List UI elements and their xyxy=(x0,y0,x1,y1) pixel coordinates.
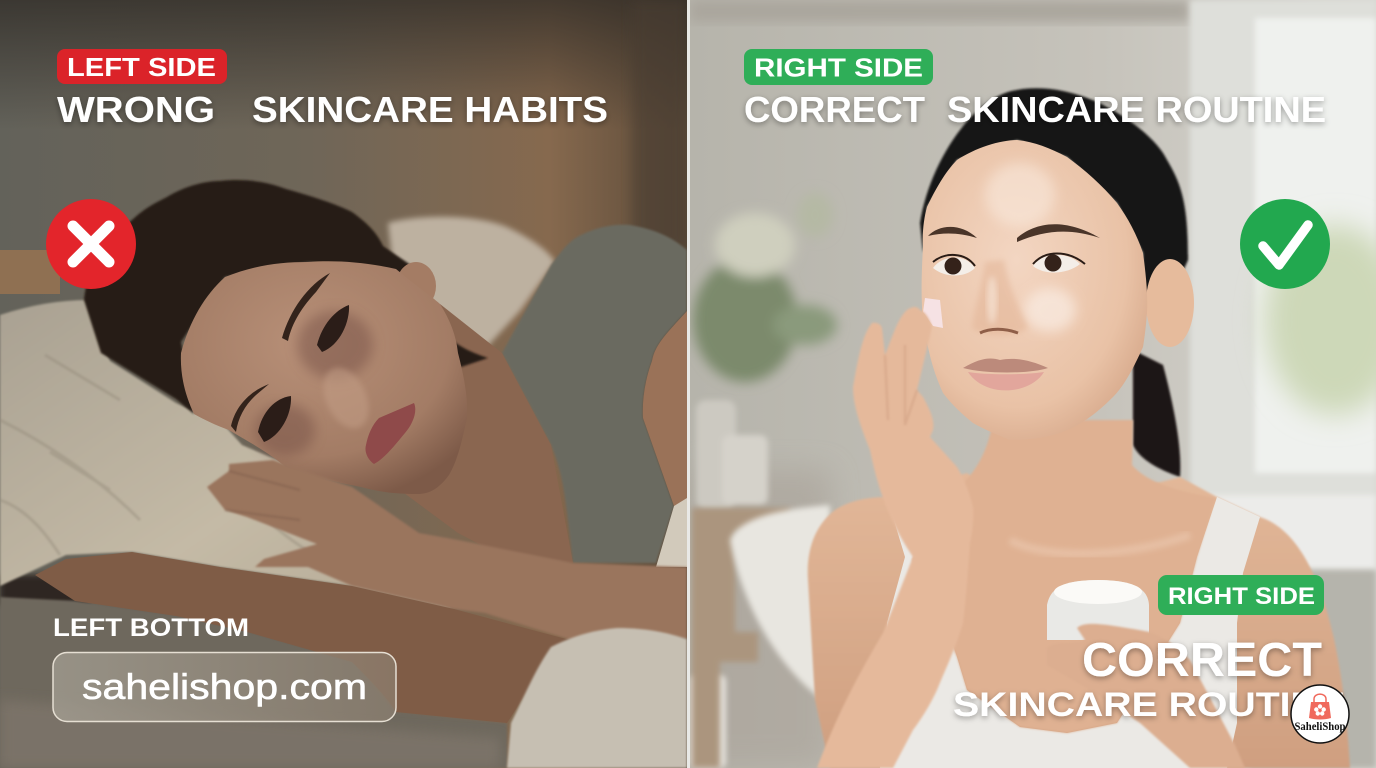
white blanket xyxy=(507,628,687,768)
finger shading xyxy=(225,471,300,520)
red badge: left side: LEFT SIDE xyxy=(67,54,216,82)
neck and chest xyxy=(400,304,573,563)
green badge: lower right side: RIGHT SIDE xyxy=(1168,583,1315,610)
bed sheets xyxy=(0,597,507,768)
raised hand and forearm xyxy=(817,307,973,768)
finger lines xyxy=(885,345,917,425)
green badge: right side: RIGHT SIDE xyxy=(754,52,923,82)
bathroom wall background xyxy=(690,0,1376,768)
lower heading: correct: CORRECT xyxy=(1082,634,1322,687)
white tank top xyxy=(880,497,1260,768)
icon: red cross xyxy=(46,199,136,289)
centre divider xyxy=(687,0,690,768)
wooden shelf xyxy=(692,508,790,768)
chest and neck skin xyxy=(912,420,1215,733)
black hair xyxy=(920,88,1188,300)
tired face xyxy=(181,261,467,494)
ear xyxy=(1146,259,1194,347)
heading: correct skincare routine xyxy=(744,89,1326,130)
forearm and hand on pillow xyxy=(207,460,687,643)
green badge: right side xyxy=(744,49,933,85)
logo: saheli shop xyxy=(1291,685,1349,743)
logo flower xyxy=(1314,704,1326,716)
vase and jars xyxy=(690,400,768,768)
panel: wrong skincare habits xyxy=(0,0,687,768)
right arm xyxy=(643,311,687,506)
ear xyxy=(400,262,436,298)
pillow creases xyxy=(1,355,304,555)
grey t-shirt xyxy=(502,225,687,563)
window with greenery xyxy=(1180,0,1376,768)
facial features xyxy=(231,273,415,464)
heading: wrong skincare habits: WRONG xyxy=(57,89,215,130)
dark bed shadow xyxy=(0,575,90,605)
bedroom wall background xyxy=(0,0,687,768)
heading: wrong skincare habits xyxy=(56,96,608,126)
facial features xyxy=(923,163,1100,390)
heading: wrong skincare habits: SKINCARE HABITS xyxy=(252,89,608,130)
bottom arm xyxy=(35,552,581,723)
white sheet patch xyxy=(656,498,687,567)
red badge: left side xyxy=(57,49,227,84)
website box: sahelishop.com xyxy=(82,666,367,707)
white bathtub xyxy=(730,505,830,705)
collarbone highlight xyxy=(1010,535,1190,554)
website box xyxy=(53,652,396,722)
cream jar xyxy=(1047,580,1149,640)
lower heading: skincare routine: SKINCARE ROUTINE xyxy=(953,686,1345,724)
logo: saheli shop: SaheliShop xyxy=(1294,719,1346,733)
hand holding jar xyxy=(1047,624,1245,768)
blurred plant xyxy=(693,193,837,382)
glowing face xyxy=(922,140,1147,440)
green badge: lower right side xyxy=(1158,575,1324,615)
hair xyxy=(84,180,488,414)
heading: correct skincare routine: SKINCARE ROUTINE xyxy=(947,89,1326,130)
main pillow xyxy=(0,300,454,609)
icon: green check xyxy=(1240,199,1330,289)
heading: correct skincare routine: CORRECT xyxy=(744,89,925,130)
ponytail xyxy=(1133,350,1180,477)
back pillow xyxy=(388,217,555,349)
body and shoulders xyxy=(808,473,1350,768)
panel: correct skincare routine xyxy=(690,0,1376,768)
label: left bottom: LEFT BOTTOM xyxy=(53,614,249,642)
